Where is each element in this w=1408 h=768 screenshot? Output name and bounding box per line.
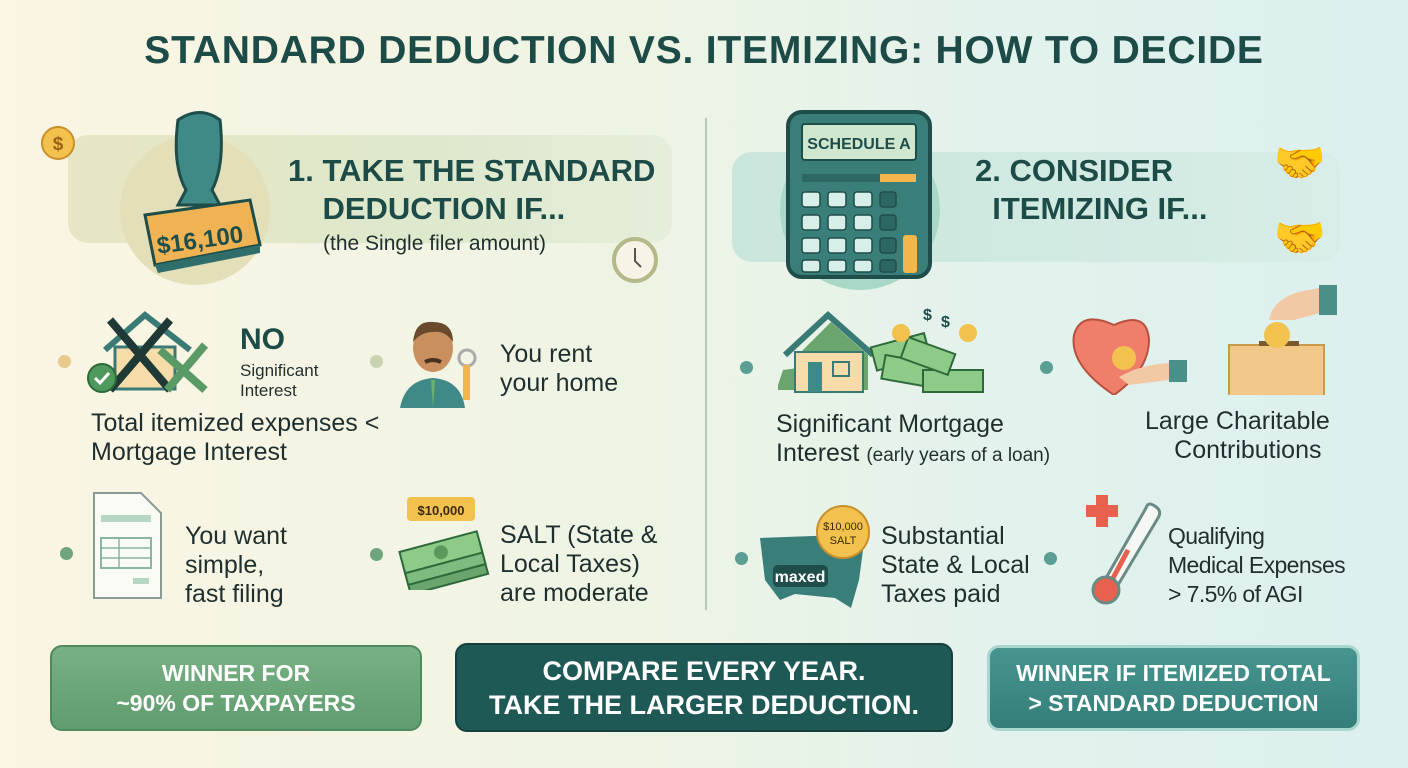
icon: handshakes: 🤝 xyxy=(1274,214,1326,261)
item: SALT moderate xyxy=(370,497,658,607)
heading xyxy=(288,153,655,226)
item: charity: Contributions xyxy=(1174,436,1321,464)
icon: form xyxy=(93,492,162,599)
heading xyxy=(975,153,1208,226)
header band xyxy=(732,152,1340,262)
item: simple filing xyxy=(60,492,287,608)
icon: calculator xyxy=(780,110,940,290)
callout: winner if itemized: WINNER IF ITEMIZED TOTAL xyxy=(1016,660,1331,686)
icon: calculator: SCHEDULE A xyxy=(807,136,911,153)
icon: person with key xyxy=(400,322,476,408)
item: no significant interest: Mortgage Interest xyxy=(91,438,287,466)
heading: 1. TAKE THE STANDARD xyxy=(288,153,655,188)
icon: US map with badge xyxy=(760,505,870,608)
item: mortgage xyxy=(740,307,1050,467)
icon: handshakes xyxy=(1274,139,1326,261)
icon: heart and donation box xyxy=(1072,285,1337,395)
callout: winner if itemized: > STANDARD DEDUCTION xyxy=(1028,690,1319,716)
item: rent: your home xyxy=(500,369,618,397)
header band xyxy=(68,135,672,243)
icon: stamp xyxy=(120,111,270,285)
icon: stamp: $16,100 xyxy=(155,221,245,260)
item: no significant interest: Interest xyxy=(240,381,297,400)
item: mortgage: Interest (early years of a loan) xyxy=(776,439,1050,467)
item: SALT maxed: Taxes paid xyxy=(881,580,1001,608)
item: no significant interest xyxy=(58,311,379,466)
callout: winner 90% xyxy=(50,645,422,731)
icon: crossed house xyxy=(87,311,208,393)
item: SALT moderate: SALT (State & xyxy=(500,521,657,549)
item: simple filing: simple, xyxy=(185,551,264,579)
callout: winner 90%: WINNER FOR xyxy=(162,660,310,686)
icon: US map with badge: $10,000 xyxy=(823,521,863,533)
icon: clock xyxy=(612,237,658,283)
heading: DEDUCTION IF... xyxy=(322,191,565,226)
item: rent: You rent xyxy=(500,340,592,368)
item: simple filing: You want xyxy=(185,522,287,550)
panel: itemizing xyxy=(732,110,1345,608)
title: STANDARD DEDUCTION VS. ITEMIZING: HOW TO DECIDE xyxy=(144,29,1264,72)
item: medical xyxy=(1044,495,1345,607)
item: no significant interest: Significant xyxy=(240,361,318,380)
icon: coin xyxy=(41,126,75,160)
icon: house and money xyxy=(778,307,984,393)
panel: standard deduction xyxy=(41,111,672,608)
heading: ITEMIZING IF... xyxy=(992,191,1208,226)
item: SALT moderate: are moderate xyxy=(500,579,649,607)
item: SALT moderate: Local Taxes) xyxy=(500,550,640,578)
icon: house and money: $ xyxy=(923,307,932,324)
callout: compare every year: COMPARE EVERY YEAR. xyxy=(542,656,866,686)
item: SALT maxed: Substantial xyxy=(881,522,1005,550)
item: no significant interest: Total itemized expenses < xyxy=(91,409,379,437)
heading: 2. CONSIDER xyxy=(975,153,1173,188)
item: medical: Qualifying xyxy=(1168,523,1264,549)
icon: house and money: $ xyxy=(941,314,950,331)
item: SALT maxed xyxy=(735,505,1030,608)
icon: money stack: $10,000 xyxy=(418,503,464,518)
item: medical: Medical Expenses xyxy=(1168,552,1345,578)
divider line xyxy=(705,118,707,610)
icon: thermometer and cross xyxy=(1086,495,1162,604)
item: rent xyxy=(370,322,618,408)
item: mortgage: Significant Mortgage xyxy=(776,410,1004,438)
callout: winner 90%: ~90% OF TAXPAYERS xyxy=(116,690,356,716)
icon: US map with badge: SALT xyxy=(830,535,857,547)
icon: coin: $ xyxy=(53,134,64,155)
item: simple filing: fast filing xyxy=(185,580,284,608)
callout: winner if itemized xyxy=(987,645,1360,731)
item: medical: > 7.5% of AGI xyxy=(1168,581,1303,607)
item: charity xyxy=(1040,285,1337,464)
subtitle: (the Single filer amount) xyxy=(323,232,546,255)
icon: handshakes: 🤝 xyxy=(1274,139,1326,186)
icon: money stack xyxy=(398,497,490,590)
callout: compare every year: TAKE THE LARGER DEDUCTION. xyxy=(489,690,919,720)
item: charity: Large Charitable xyxy=(1145,407,1330,435)
callout: compare every year xyxy=(455,643,953,732)
icon: US map with badge: maxed xyxy=(775,569,825,586)
item: no significant interest: NO xyxy=(240,323,285,356)
item: SALT maxed: State & Local xyxy=(881,551,1030,579)
